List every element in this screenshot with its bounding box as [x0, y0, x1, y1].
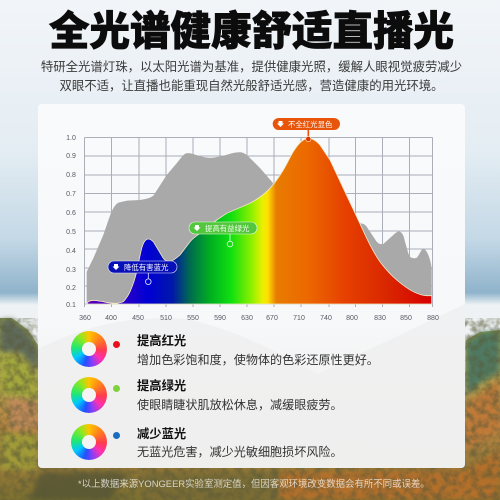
y axis labels: 0.2: [66, 285, 76, 292]
rock left, mountain right, colour patches: [0, 319, 500, 500]
x axis labels: 710: [293, 315, 305, 322]
callout: red light color rendering: [273, 118, 340, 142]
y axis labels: 0.4: [66, 248, 76, 255]
subtitle text: [41, 60, 462, 92]
text block: reduce blue light: 无蓝光危害，减少光敏细胞损坏风险。: [137, 445, 343, 459]
x axis labels: 550: [187, 315, 199, 322]
y axis labels: [66, 135, 76, 309]
chart area: full-spectrum gradient curve: [87, 138, 432, 304]
chart grid: [84, 138, 432, 307]
callout: reduce harmful blue light: [108, 261, 177, 285]
text block: increase green light: [137, 379, 343, 412]
x axis labels: 360: [79, 315, 91, 322]
subtitle text: 特研全光谱灯珠，以太阳光谱为基准，提供健康光照，缓解人眼视觉疲劳减少: [41, 60, 462, 74]
text block: increase red light: 提高红光: [137, 334, 186, 348]
y axis labels: 0.8: [66, 172, 76, 179]
y axis labels: 0.1: [66, 302, 76, 309]
text block: reduce blue light: [137, 426, 343, 459]
x axis labels: 830: [374, 315, 386, 322]
icon: red dot: [113, 341, 120, 348]
chart area: gray reference spectrum: [87, 152, 432, 304]
panel: main card: [38, 104, 465, 468]
y axis labels: 0.7: [66, 191, 76, 198]
x axis labels: 740: [320, 315, 332, 322]
text block: increase green light: 提高绿光: [137, 379, 186, 393]
x axis labels: 590: [214, 315, 226, 322]
text block: reduce blue light: 减少蓝光: [137, 426, 186, 440]
x axis labels: 670: [266, 315, 278, 322]
x axis labels: [79, 315, 439, 322]
y axis labels: 0.5: [66, 229, 76, 236]
y axis labels: 1.0: [66, 135, 76, 142]
x axis labels: 880: [427, 315, 439, 322]
y axis labels: 0.6: [66, 210, 76, 217]
x axis labels: 850: [400, 315, 412, 322]
callout: red light color rendering: 不全红光显色: [288, 120, 333, 129]
title: 全光谱健康舒适直播光: [49, 8, 454, 54]
x axis labels: 450: [132, 315, 144, 322]
icon: color wheel green: [71, 377, 107, 413]
subtitle text: 双眼不适，让直播也能重现自然光般舒适光感，营造健康的用光环境。: [59, 78, 444, 92]
y axis labels: 0.9: [66, 153, 76, 160]
x axis labels: 510: [160, 315, 172, 322]
icon: blue dot: [113, 432, 120, 439]
x axis labels: 800: [346, 315, 358, 322]
x axis labels: 400: [105, 315, 117, 322]
text block: increase red light: 增加色彩饱和度，使物体的色彩还原性更好。: [137, 352, 379, 366]
callout: increase beneficial green light: [189, 222, 257, 247]
text block: increase green light: 使眼睛睫状肌放松休息，减缓眼疲劳。: [137, 398, 343, 412]
text block: increase red light: [137, 334, 379, 366]
icon: color wheel red: [71, 331, 107, 367]
icon: green dot: [113, 385, 120, 392]
callout: increase beneficial green light: 提高有益绿光: [205, 224, 250, 233]
icon: color wheel blue: [71, 424, 107, 460]
callout: reduce harmful blue light: 降低有害蓝光: [124, 263, 169, 272]
x axis labels: 630: [241, 315, 253, 322]
footnote: *以上数据来源YONGEER实验室测定值，但因客观环境改变数据会有所不同或误差。: [78, 478, 430, 489]
y axis labels: 0.3: [66, 267, 76, 274]
